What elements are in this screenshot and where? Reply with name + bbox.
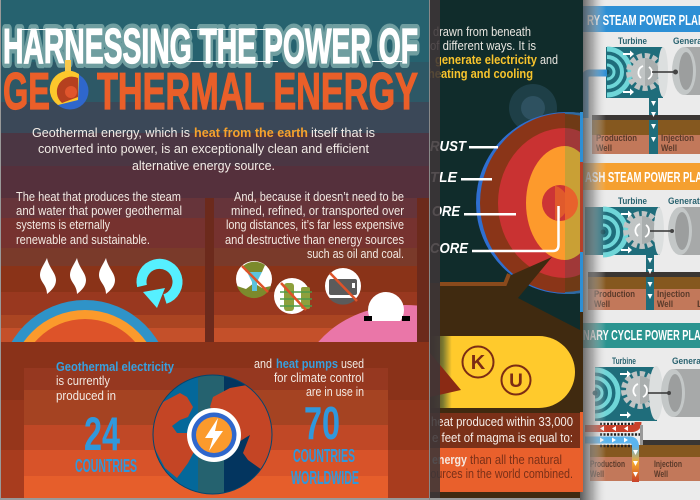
stat: 24 countries: COUNTRIES	[75, 456, 137, 476]
heat exchanger	[585, 422, 643, 482]
panel: dry steam plant: Injection	[661, 133, 694, 143]
middle column	[430, 0, 580, 500]
panel: binary cycle plant: Turbine	[612, 356, 636, 366]
panel: flash steam plant: Turbine	[618, 196, 647, 206]
energy comparison band: than all the natural	[470, 453, 562, 467]
panel: dry steam plant	[580, 6, 700, 154]
intro text: Geothermal energy, which is	[32, 126, 190, 140]
text: less expensive: mined, refined, or transported over	[231, 204, 404, 218]
stat: 70 countries: 70	[304, 397, 340, 449]
panel: binary cycle plant: Well	[590, 469, 604, 479]
icon: potassium K	[462, 346, 494, 378]
heading: binary cycle	[580, 323, 700, 348]
panel: binary cycle plant	[572, 323, 700, 482]
panel: dry steam plant: Turbine	[618, 36, 647, 46]
panel: flash steam plant: Production	[594, 289, 635, 299]
icon: potassium K: K	[471, 352, 486, 374]
icon: steam wisps	[40, 258, 115, 294]
magma heat band: e feet of magma is equal to:	[432, 431, 573, 445]
stat: 70 countries: WORLDWIDE	[291, 468, 359, 488]
text: less expensive: such as oil and coal.	[307, 247, 404, 261]
stat: 70 countries	[254, 357, 364, 488]
intro text: itself that is	[311, 126, 375, 140]
stat: 70 countries: for climate control	[274, 371, 364, 385]
middle text: extraction: drawn from beneath	[433, 25, 531, 39]
icon: uranium U: U	[509, 371, 523, 392]
text: renewable heat	[16, 190, 182, 247]
magma heat band	[430, 413, 580, 448]
middle text: extraction: generate electricity	[435, 53, 537, 67]
energy comparison band	[425, 448, 580, 492]
text: less expensive: long distances, it’s far less expensive	[226, 218, 404, 232]
stat: 24 countries: produced in	[56, 389, 116, 403]
panel: dry steam plant: Well	[661, 143, 677, 153]
stat: 70 countries: COUNTRIES	[293, 446, 355, 466]
left column: background bands	[0, 0, 429, 500]
energy comparison band: energy	[432, 453, 467, 467]
icon: renewable arrow	[142, 264, 178, 308]
panel: dry steam plant: Production	[596, 133, 637, 143]
stat: 70 countries: and	[254, 357, 272, 371]
earth layer labels: RUST	[430, 138, 468, 155]
earth layer labels	[430, 138, 558, 257]
yellow pill with K and U	[430, 336, 575, 408]
earth layer labels: TLE	[430, 169, 458, 186]
middle text: extraction: of different ways. It is	[430, 39, 536, 53]
intro text: converted into power, is an exceptionally clean and efficient	[38, 142, 370, 156]
icon: no fracking	[236, 261, 272, 298]
middle text: extraction: heating and cooling	[428, 67, 533, 81]
heading: flash steam	[580, 163, 700, 190]
stat: 24 countries: 24	[84, 407, 120, 460]
earth layer labels: CORE	[430, 240, 469, 257]
brown ground with wedge	[430, 257, 580, 500]
panel: flash steam plant: Well	[657, 299, 673, 309]
intro text	[32, 126, 375, 173]
title line 2 start: GE	[3, 63, 50, 121]
magma heat band: heat produced within 33,000	[431, 415, 573, 429]
text: renewable heat: systems is eternally	[16, 218, 111, 232]
energy comparison band: sources in the world combined.	[425, 467, 573, 481]
text: less expensive: And, because it doesn’t need to be	[234, 190, 404, 204]
panel: flash steam plant	[580, 163, 700, 310]
text: renewable heat: and water that power geothermal	[16, 204, 182, 218]
stat: 70 countries: heat pumps	[276, 357, 338, 371]
text: less expensive: and destructive than energy sources	[225, 233, 404, 247]
right column	[572, 0, 700, 500]
text: renewable heat: renewable and sustainable.	[16, 233, 150, 247]
icon: no refining	[274, 278, 312, 314]
intro text: heat from the earth	[194, 126, 308, 140]
stat: 70 countries: are in use in	[306, 385, 364, 399]
panel: dry steam plant: Well	[596, 143, 612, 153]
intro text: alternative energy source.	[132, 159, 275, 173]
heading: dry steam	[580, 6, 700, 32]
middle text: extraction	[428, 25, 558, 81]
stat: 24 countries: is currently	[56, 374, 111, 388]
stat: 24 countries	[56, 360, 174, 476]
panel: binary cycle plant: Well	[654, 469, 668, 479]
earth layer labels: ORE	[432, 203, 461, 220]
earth layers diagram	[476, 84, 580, 294]
icon: earth as letter O	[50, 60, 88, 110]
title line 2 end: THERMAL ENERGY	[97, 63, 418, 121]
panel: flash steam plant: Injection	[657, 289, 690, 299]
globe with energy badge	[152, 374, 272, 494]
title line 1	[3, 20, 418, 74]
earth arch	[12, 300, 158, 342]
icon: no transport	[325, 268, 361, 305]
panel: flash steam plant: Well	[594, 299, 610, 309]
middle text: extraction: and	[540, 53, 558, 67]
pink mound with drilling ball	[318, 292, 417, 342]
panel: binary cycle plant: Injection	[654, 459, 682, 469]
text: renewable heat: The heat that produces the steam	[16, 190, 181, 204]
title	[3, 20, 418, 121]
stat: 70 countries: used	[341, 357, 364, 371]
text: less expensive	[225, 190, 404, 261]
icon: uranium U	[502, 366, 530, 394]
panel: binary cycle plant: Production	[590, 459, 625, 469]
stat: 24 countries: Geothermal electricity	[56, 360, 174, 374]
